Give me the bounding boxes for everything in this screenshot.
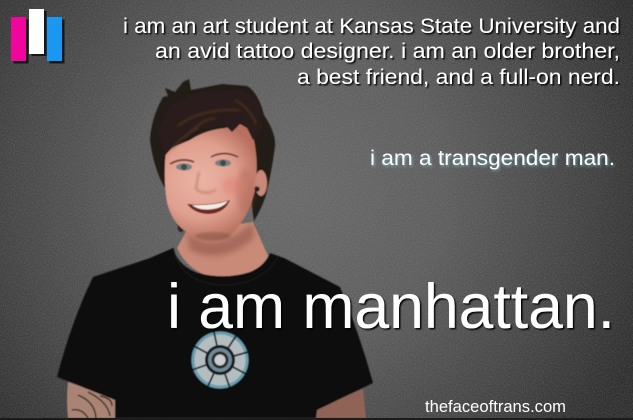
black t-shirt	[57, 248, 373, 418]
website: thefaceoftrans.com	[425, 398, 566, 416]
smile	[187, 200, 230, 214]
identity statement: i am a transgender man.	[370, 147, 615, 170]
eyes	[176, 159, 231, 171]
neck shadow	[186, 222, 254, 256]
logo: three bars	[11, 9, 64, 64]
bio line 2: an avid tattoo designer. i am an older brother,	[155, 40, 620, 63]
bio line 3: a best friend, and a full-on nerd.	[297, 66, 620, 89]
person portrait	[57, 79, 373, 418]
cheek blush	[222, 177, 242, 195]
bottom dark strip	[0, 418, 633, 420]
ear plug	[254, 186, 260, 192]
hair highlights	[172, 100, 256, 148]
hair strand left of jaw	[178, 220, 184, 232]
shirt collar	[173, 248, 278, 285]
eyebrows	[170, 154, 238, 164]
arm: right	[315, 389, 366, 418]
ear	[255, 170, 267, 196]
title: i am manhattan.	[167, 272, 615, 342]
chin stubble	[195, 232, 231, 240]
arc reactor shirt graphic	[192, 332, 248, 388]
cheek shading	[236, 168, 254, 212]
neck	[177, 222, 268, 278]
face	[165, 122, 257, 242]
hair back	[150, 79, 275, 221]
arm: left with tattoo	[67, 382, 116, 418]
nose shadow	[196, 172, 216, 193]
hair fringe	[158, 90, 262, 156]
bio text	[123, 15, 620, 89]
bio line 1: i am an art student at Kansas State University and	[123, 15, 620, 38]
